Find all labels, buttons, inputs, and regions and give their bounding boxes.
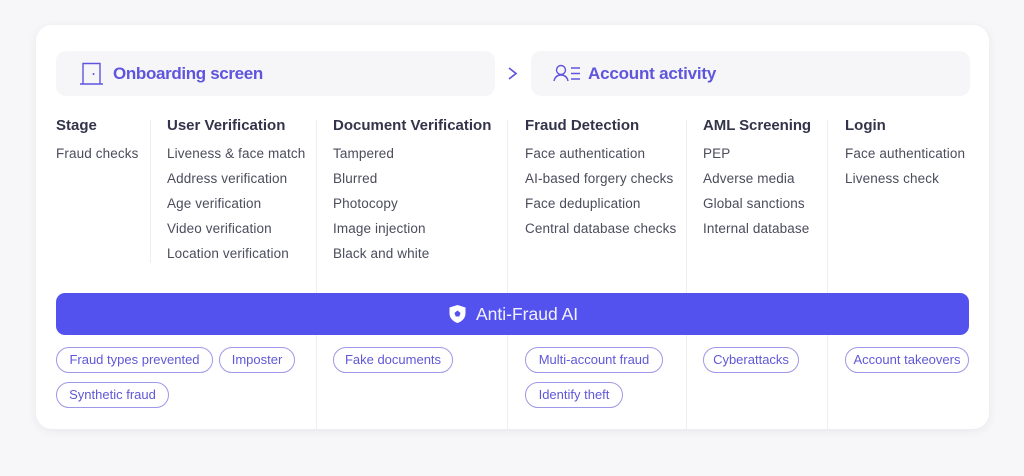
column: AML screening: [703, 117, 811, 236]
column: stage: Stage: [56, 117, 97, 134]
column: fraud detection: Face authentication: [525, 146, 645, 161]
tag: Multi-account fraud: [525, 347, 663, 373]
column: login: Face authentication: [845, 146, 965, 161]
tag: Identify theft: [525, 382, 623, 408]
column: AML screening: Adverse media: [703, 171, 795, 186]
heading: account activity: Account activity: [588, 64, 716, 83]
column: document verification: Blurred: [333, 171, 377, 186]
banner: Anti-Fraud AI: [56, 293, 969, 335]
column: user verification: User Verification: [167, 117, 285, 134]
column: document verification: Tampered: [333, 146, 394, 161]
tag: Fraud types prevented: [56, 347, 213, 373]
column: user verification: Age verification: [167, 196, 261, 211]
column: document verification: Document Verification: [333, 117, 491, 134]
tag: Account takeovers: [845, 347, 969, 373]
panel: account activity band: [531, 51, 970, 96]
tag: Imposter: [219, 347, 295, 373]
column: fraud detection: AI-based forgery checks: [525, 171, 673, 186]
column: stage: Fraud checks: [56, 146, 138, 161]
tag: Fake documents: Fake documents: [345, 352, 441, 367]
banner label: Anti-Fraud AI: [476, 304, 578, 324]
tag: Synthetic fraud: [56, 382, 169, 408]
tag: Account takeovers: Account takeovers: [854, 352, 960, 367]
tag: Cyberattacks: [703, 347, 799, 373]
icon: user list: [553, 64, 580, 82]
icon: shield: [450, 305, 466, 323]
heading: onboarding screen: Onboarding screen: [113, 64, 263, 83]
column: document verification: [333, 117, 491, 261]
column: fraud detection: [525, 117, 676, 236]
column: login: Login: [845, 117, 886, 134]
icon: door: [80, 62, 103, 85]
column: user verification: Liveness & face match: [167, 146, 305, 161]
column: stage: [56, 117, 138, 161]
tag: Imposter: Imposter: [232, 352, 282, 367]
column: user verification: [167, 117, 305, 261]
tag: Cyberattacks: Cyberattacks: [713, 352, 789, 367]
tag: Fake documents: [333, 347, 453, 373]
column: login: [845, 117, 965, 186]
tag: Multi-account fraud: Multi-account fraud: [539, 352, 649, 367]
tag: Fraud types prevented: Fraud types prevented: [69, 352, 200, 367]
column: user verification: Location verification: [167, 246, 289, 261]
arrow: chevron between stages: [508, 67, 518, 80]
column: document verification: Image injection: [333, 221, 426, 236]
tag: Identify theft: Identify theft: [539, 387, 609, 402]
column: AML screening: PEP: [703, 146, 730, 161]
column: document verification: Photocopy: [333, 196, 398, 211]
column: fraud detection: Central database checks: [525, 221, 676, 236]
column: document verification: Black and white: [333, 246, 429, 261]
tag: Synthetic fraud: Synthetic fraud: [69, 387, 156, 402]
column: AML screening: Internal database: [703, 221, 809, 236]
column: AML screening: Global sanctions: [703, 196, 805, 211]
column: user verification: Address verification: [167, 171, 287, 186]
column: user verification: Video verification: [167, 221, 272, 236]
column: fraud detection: Face deduplication: [525, 196, 640, 211]
column: AML screening: AML Screening: [703, 117, 811, 134]
white card: [36, 25, 989, 429]
column: fraud detection: Fraud Detection: [525, 117, 639, 134]
panel: onboarding screen band: [56, 51, 495, 96]
column: login: Liveness check: [845, 171, 939, 186]
